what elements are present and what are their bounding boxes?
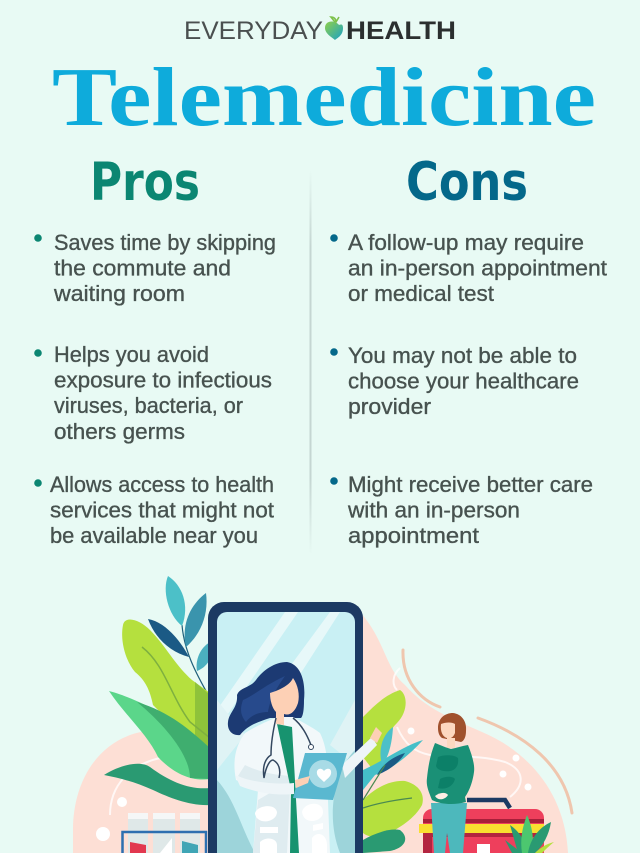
con item 2: provider — [348, 394, 431, 419]
con item 2: You may not be able to — [348, 343, 577, 368]
logo: Everyday Health — [184, 17, 456, 45]
pro item 1 — [34, 230, 276, 306]
patient — [427, 713, 474, 853]
logo: Everyday Health: HEALTH — [346, 17, 456, 45]
pro item 3: Allows access to health — [50, 472, 274, 497]
heading: Pros: Pros — [90, 152, 200, 213]
con item 1: or medical test — [348, 281, 494, 306]
tablet — [293, 753, 347, 800]
pro item 2: Helps you avoid — [54, 342, 209, 367]
left plant — [104, 576, 212, 805]
pro item 2: others germs — [54, 419, 185, 444]
title: Telemedicine — [52, 51, 596, 144]
illustration: telemedicine scene — [73, 576, 572, 853]
front plant — [505, 815, 554, 853]
pro item 3: be available near you — [50, 523, 258, 548]
panel: cons list — [330, 230, 607, 548]
test tubes — [122, 813, 206, 853]
con item 1 — [330, 230, 607, 306]
decorative arcs — [110, 650, 572, 815]
stethoscope — [263, 718, 311, 778]
heading: Cons: Cons — [406, 152, 528, 213]
con item 3: appointment — [348, 523, 479, 548]
hair — [228, 662, 304, 735]
logo: Everyday Health: EVERYDAY — [184, 17, 323, 45]
coat pockets — [255, 804, 327, 853]
right plant — [363, 690, 423, 853]
con item 3: Might receive better care — [348, 472, 593, 497]
background blob — [73, 612, 568, 853]
con item 2 — [330, 343, 579, 419]
scrub — [277, 724, 299, 853]
con item 3: with an in-person — [347, 498, 520, 522]
con item 2: choose your healthcare — [348, 368, 579, 394]
face — [270, 678, 299, 725]
phone frame — [208, 602, 363, 853]
pro item 1: waiting room — [53, 281, 185, 306]
con item 3 — [330, 472, 593, 548]
arms — [235, 737, 377, 795]
first aid kit — [419, 800, 544, 853]
white dots — [96, 728, 532, 841]
con item 1: an in-person appointment — [348, 256, 607, 280]
phone screen — [217, 612, 355, 853]
pro item 1: the commute and — [54, 256, 231, 280]
con item 1: A follow-up may require — [348, 230, 584, 255]
panel: pros list — [34, 230, 276, 548]
pro item 2: viruses, bacteria, or — [54, 393, 243, 418]
coat — [234, 717, 330, 853]
hand — [295, 727, 382, 788]
pro item 3: services that might not — [50, 498, 274, 522]
pro item 2 — [34, 342, 272, 444]
phone with doctor — [208, 602, 382, 853]
doctor — [228, 662, 382, 853]
pro item 3 — [34, 472, 274, 548]
pro item 1: Saves time by skipping — [54, 230, 276, 255]
pro item 2: exposure to infectious — [54, 368, 272, 392]
